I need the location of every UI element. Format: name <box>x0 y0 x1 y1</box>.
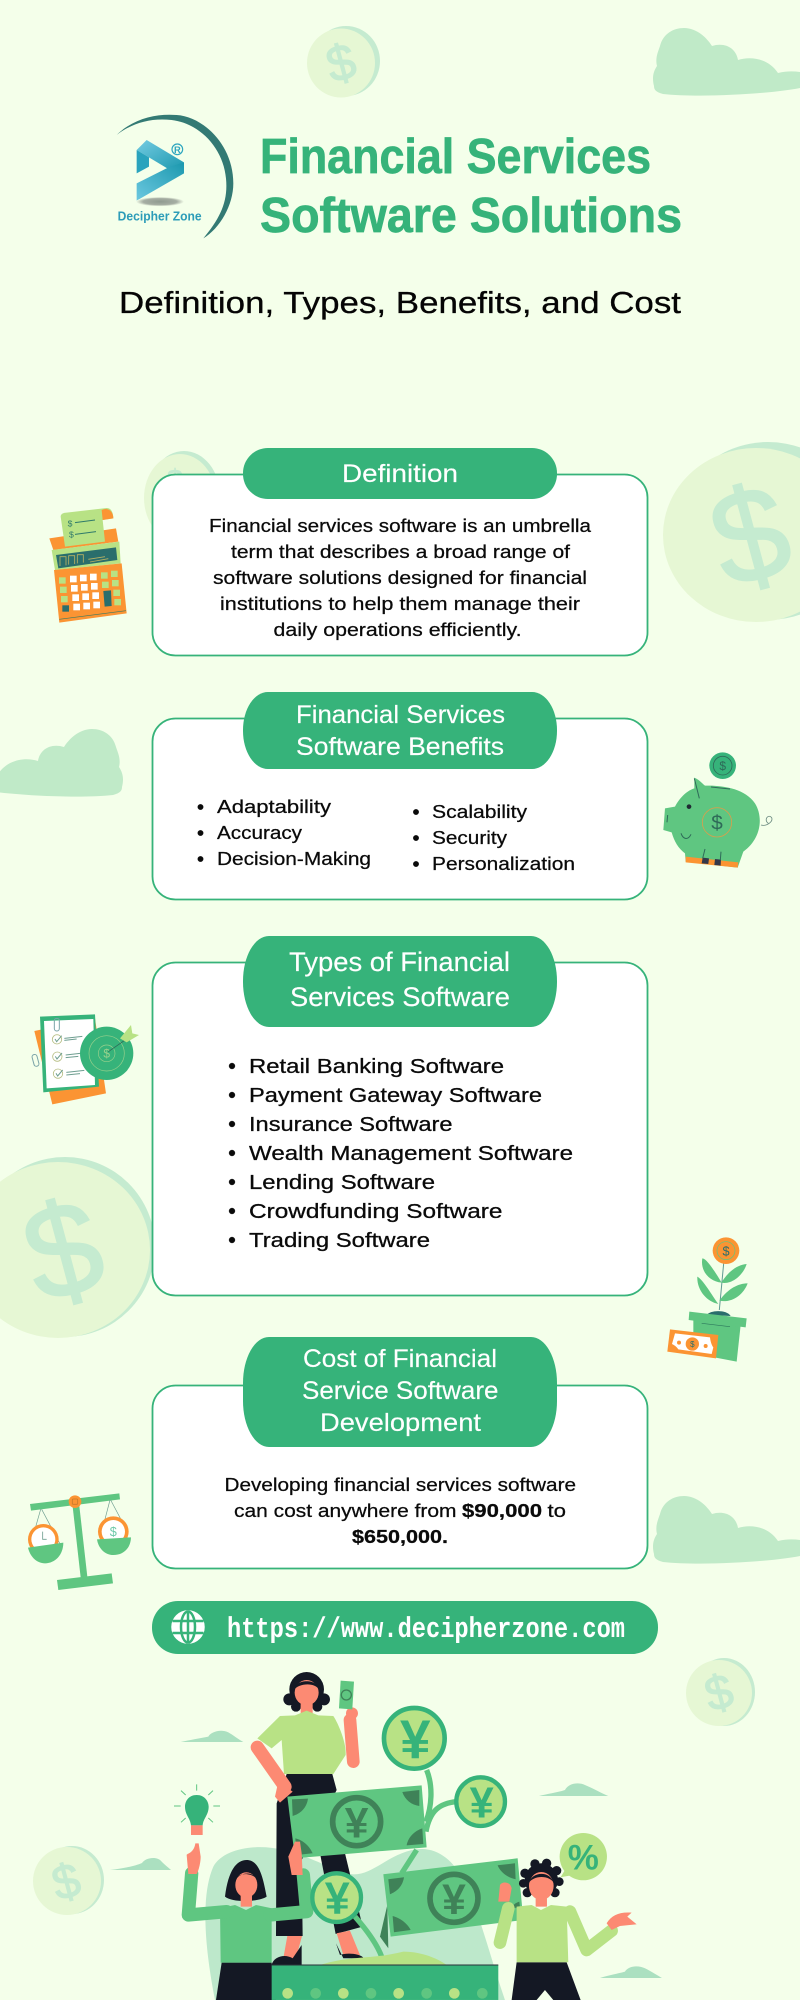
cost text <box>224 1474 576 1547</box>
background coin: large left <box>0 1157 155 1338</box>
types list: Retail Banking Software <box>249 1055 504 1078</box>
website pill <box>152 1601 658 1654</box>
icon: checklist and target <box>32 1014 139 1104</box>
benefits list: left: Accuracy <box>217 822 303 843</box>
cost text: $650,000. <box>352 1526 448 1547</box>
coin: right yen <box>456 1777 505 1827</box>
left woman <box>187 1842 307 2000</box>
benefits list: left <box>198 796 371 869</box>
heading pill: definition <box>243 448 557 499</box>
icon: money plant: $ <box>690 1340 695 1349</box>
heading pill: cost <box>243 1337 557 1447</box>
icon: checklist and target: $ <box>103 1047 110 1061</box>
background coin: lower right: $ <box>699 1664 739 1723</box>
background coin: lower left: $ <box>47 1853 86 1912</box>
heading pill: benefits: Software Benefits <box>296 733 504 761</box>
benefits list: left: Adaptability <box>217 796 332 817</box>
money bill: lower: ¥ <box>442 1876 466 1924</box>
panel: definition <box>152 448 648 656</box>
speech bubble: percent: % <box>568 1838 599 1877</box>
money bill: upper: ¥ <box>345 1799 369 1847</box>
coin: top yen <box>384 1708 445 1770</box>
panel: benefits <box>152 692 648 900</box>
types list <box>229 1055 573 1252</box>
heading pill: definition: Definition <box>342 460 458 488</box>
background coin: large right <box>663 442 800 622</box>
panel: types <box>152 936 648 1296</box>
background cloud: lower right <box>653 1496 800 1564</box>
website url: https://www.decipherzone.com <box>227 1613 625 1646</box>
heading pill: cost: Development <box>320 1409 481 1437</box>
cost text: can cost anywhere from <box>234 1500 456 1521</box>
coin: right yen: ¥ <box>470 1779 494 1827</box>
heading pill: cost: Service Software <box>302 1377 498 1405</box>
background coin: behind definition card: $ <box>167 464 184 497</box>
icon: money plant <box>667 1237 748 1362</box>
planter <box>272 1952 498 2000</box>
money bill: upper <box>287 1785 427 1858</box>
standing woman <box>257 1672 364 1965</box>
types list: Payment Gateway Software <box>249 1084 542 1107</box>
coin: top yen: ¥ <box>400 1708 431 1770</box>
coin: lower yen <box>312 1873 361 1924</box>
definition text: daily operations efficiently. <box>274 619 522 640</box>
heading pill: types: Services Software <box>290 982 510 1012</box>
icon: piggy bank: $ <box>711 812 723 835</box>
background cloud: top right <box>653 28 800 96</box>
definition text: institutions to help them manage their <box>220 593 580 614</box>
background coin: behind definition card <box>144 451 220 542</box>
money bill: lower <box>383 1858 523 1937</box>
background coin: top <box>307 26 380 98</box>
icon: piggy bank: $ <box>719 759 726 773</box>
logo: Decipher Zone <box>117 115 233 238</box>
types list: Trading Software <box>249 1229 430 1252</box>
money stems <box>355 1770 457 1957</box>
types list: Lending Software <box>249 1171 435 1194</box>
benefits list: right: Security <box>432 827 508 848</box>
icon: money plant: $ <box>722 1244 730 1258</box>
logo: Decipher Zone: R <box>174 145 181 155</box>
illustration: team growing money <box>174 1672 662 2000</box>
cost text: Developing financial services software <box>224 1474 576 1495</box>
heading pill: benefits: Financial Services <box>296 701 505 729</box>
types list: Insurance Software <box>249 1113 452 1136</box>
heading pill: types <box>243 936 557 1027</box>
background cloud: small lower left <box>110 1858 171 1870</box>
cost text: $90,000 <box>462 1500 542 1521</box>
definition text: Financial services software is an umbrella <box>209 515 592 536</box>
background cloud: left <box>0 729 123 797</box>
types list: Wealth Management Software <box>249 1142 573 1165</box>
panel: cost <box>152 1337 648 1568</box>
right woman <box>498 1859 637 2000</box>
heading pill: benefits <box>243 692 557 769</box>
icon: balance scale: $ <box>110 1525 117 1539</box>
title: Software Solutions <box>260 189 682 243</box>
benefits list: left: Decision-Making <box>217 848 371 869</box>
types list: Crowdfunding Software <box>249 1200 502 1223</box>
heading pill: types: Types of Financial <box>289 947 510 977</box>
speech bubble: percent <box>560 1833 607 1880</box>
hill background <box>205 1847 505 2000</box>
benefits list: right <box>413 801 575 874</box>
cost text: to <box>548 1500 566 1521</box>
background coin: lower left <box>33 1846 104 1915</box>
definition text: software solutions designed for financial <box>213 567 587 588</box>
subtitle: Definition, Types, Benefits, and Cost <box>119 285 681 320</box>
coin: lower yen: ¥ <box>325 1873 350 1924</box>
icon: calculator: $ <box>69 530 74 540</box>
icon: globe <box>172 1612 204 1642</box>
heading pill: cost: Cost of Financial <box>303 1345 497 1373</box>
benefits list: right: Personalization <box>432 853 575 874</box>
benefits list: right: Scalability <box>432 801 528 822</box>
icon: balance scale <box>28 1493 131 1590</box>
bulb <box>174 1784 220 1835</box>
background coin: large left: $ <box>9 1170 118 1331</box>
icon: piggy bank <box>663 752 772 868</box>
title <box>260 130 682 243</box>
background coin: lower right <box>686 1658 755 1726</box>
icon: calculator <box>49 508 127 623</box>
icon: calculator: $ <box>68 519 73 529</box>
definition text: term that describes a broad range of <box>231 541 571 562</box>
logo: Decipher Zone: Decipher Zone <box>118 210 202 224</box>
small clouds <box>181 1731 662 1978</box>
background coin: top: $ <box>320 32 362 94</box>
title: Financial Services <box>260 130 651 184</box>
definition text <box>209 515 592 640</box>
